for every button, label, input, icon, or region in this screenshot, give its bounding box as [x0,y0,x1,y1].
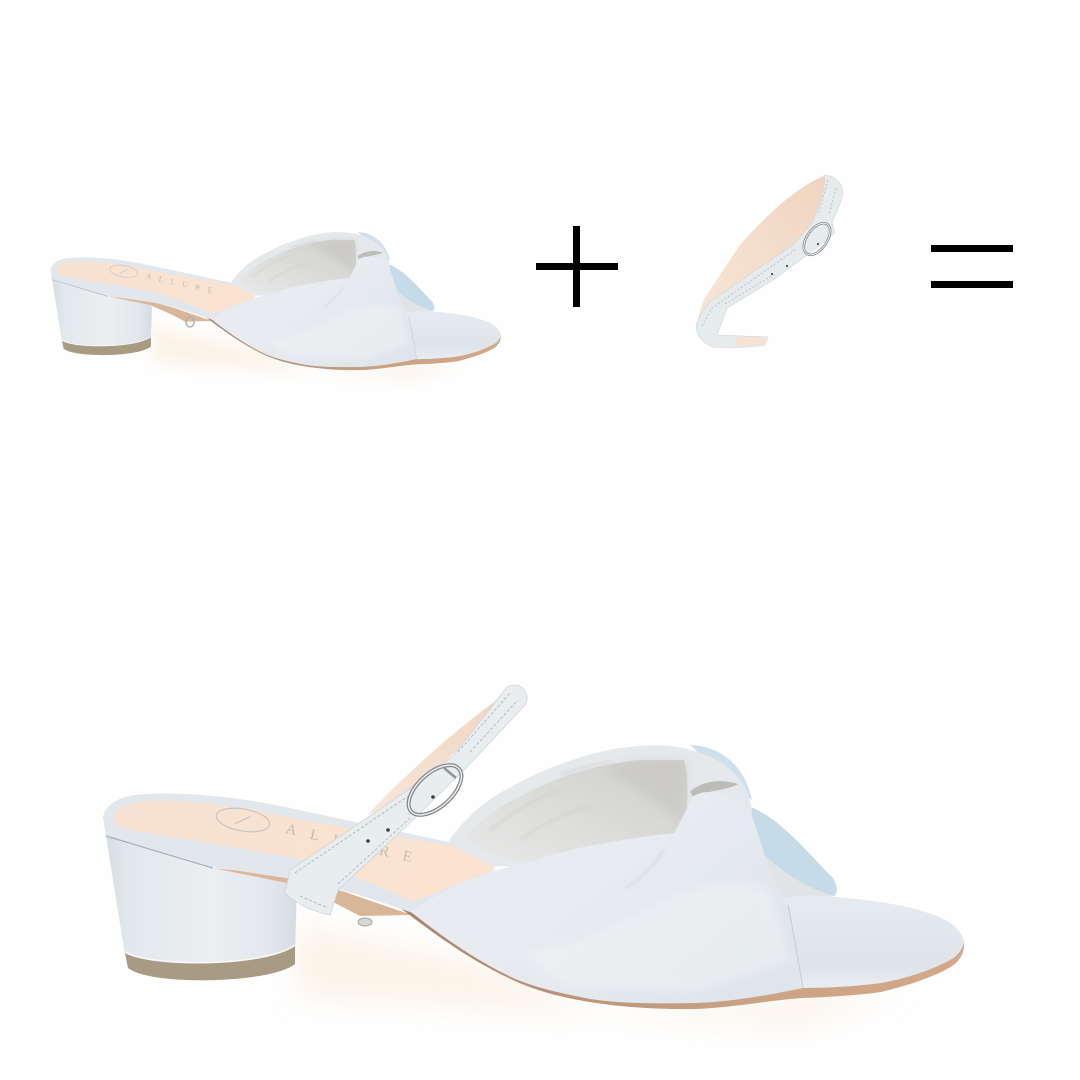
lining creases [490,762,610,840]
floor shadow [295,925,900,1025]
strap holes [366,795,435,843]
detachable strap accessory [696,175,843,348]
strap buckle [798,219,836,259]
strap band [285,685,527,915]
front vamp [411,792,803,1003]
inner lining [448,745,752,868]
strap rear peach lining [368,696,512,814]
buckle [400,756,470,824]
blue underside of twist [690,745,837,900]
shoe: small mule without strap [50,232,501,378]
strap stitching [702,180,836,326]
strap outer band [696,175,843,348]
equals sign [931,245,1013,288]
strap foot [735,337,768,347]
toe bed [780,896,964,988]
peach shank gap [213,868,412,916]
insole [114,801,496,902]
strap holes [771,243,819,275]
heel seat rim [103,794,495,913]
shoe: large slingback mule, base [103,745,964,1025]
outsole edge [400,908,964,1009]
insole brand text: ALLURE [284,821,427,869]
insole logo [215,804,271,836]
metal pin [358,918,372,926]
strap stitching [295,693,518,908]
strap peach lining [697,175,830,335]
plus sign [536,226,618,307]
block heel [106,836,297,980]
shoe: strap on large mule [285,685,527,926]
icon: small pin on mule [186,317,194,327]
